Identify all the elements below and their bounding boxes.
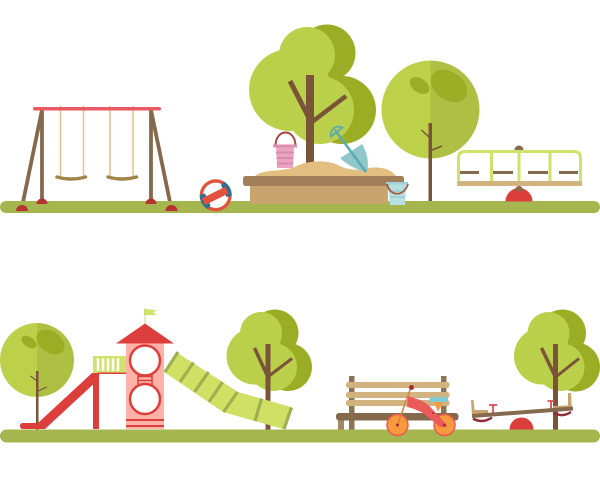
shovel [331,127,368,172]
sandbox [243,161,404,204]
tree: round tree [382,60,479,202]
bench [336,376,458,430]
tilting seesaw [471,393,573,430]
tower [116,308,174,429]
red slide [20,356,126,429]
ground: bottom [0,430,600,442]
swing set [22,106,171,207]
tree: bottom left round [0,323,74,430]
swing feet [16,199,178,211]
balance bike [387,385,455,436]
blue bucket [386,182,408,205]
bench seesaw [457,146,582,202]
tree: right [514,310,600,430]
tube slide [164,352,292,429]
pink bucket [273,132,297,168]
ball [200,179,232,211]
tree: middle [226,310,312,430]
ground: top [0,201,600,213]
tree: large sandbox tree [249,24,376,163]
